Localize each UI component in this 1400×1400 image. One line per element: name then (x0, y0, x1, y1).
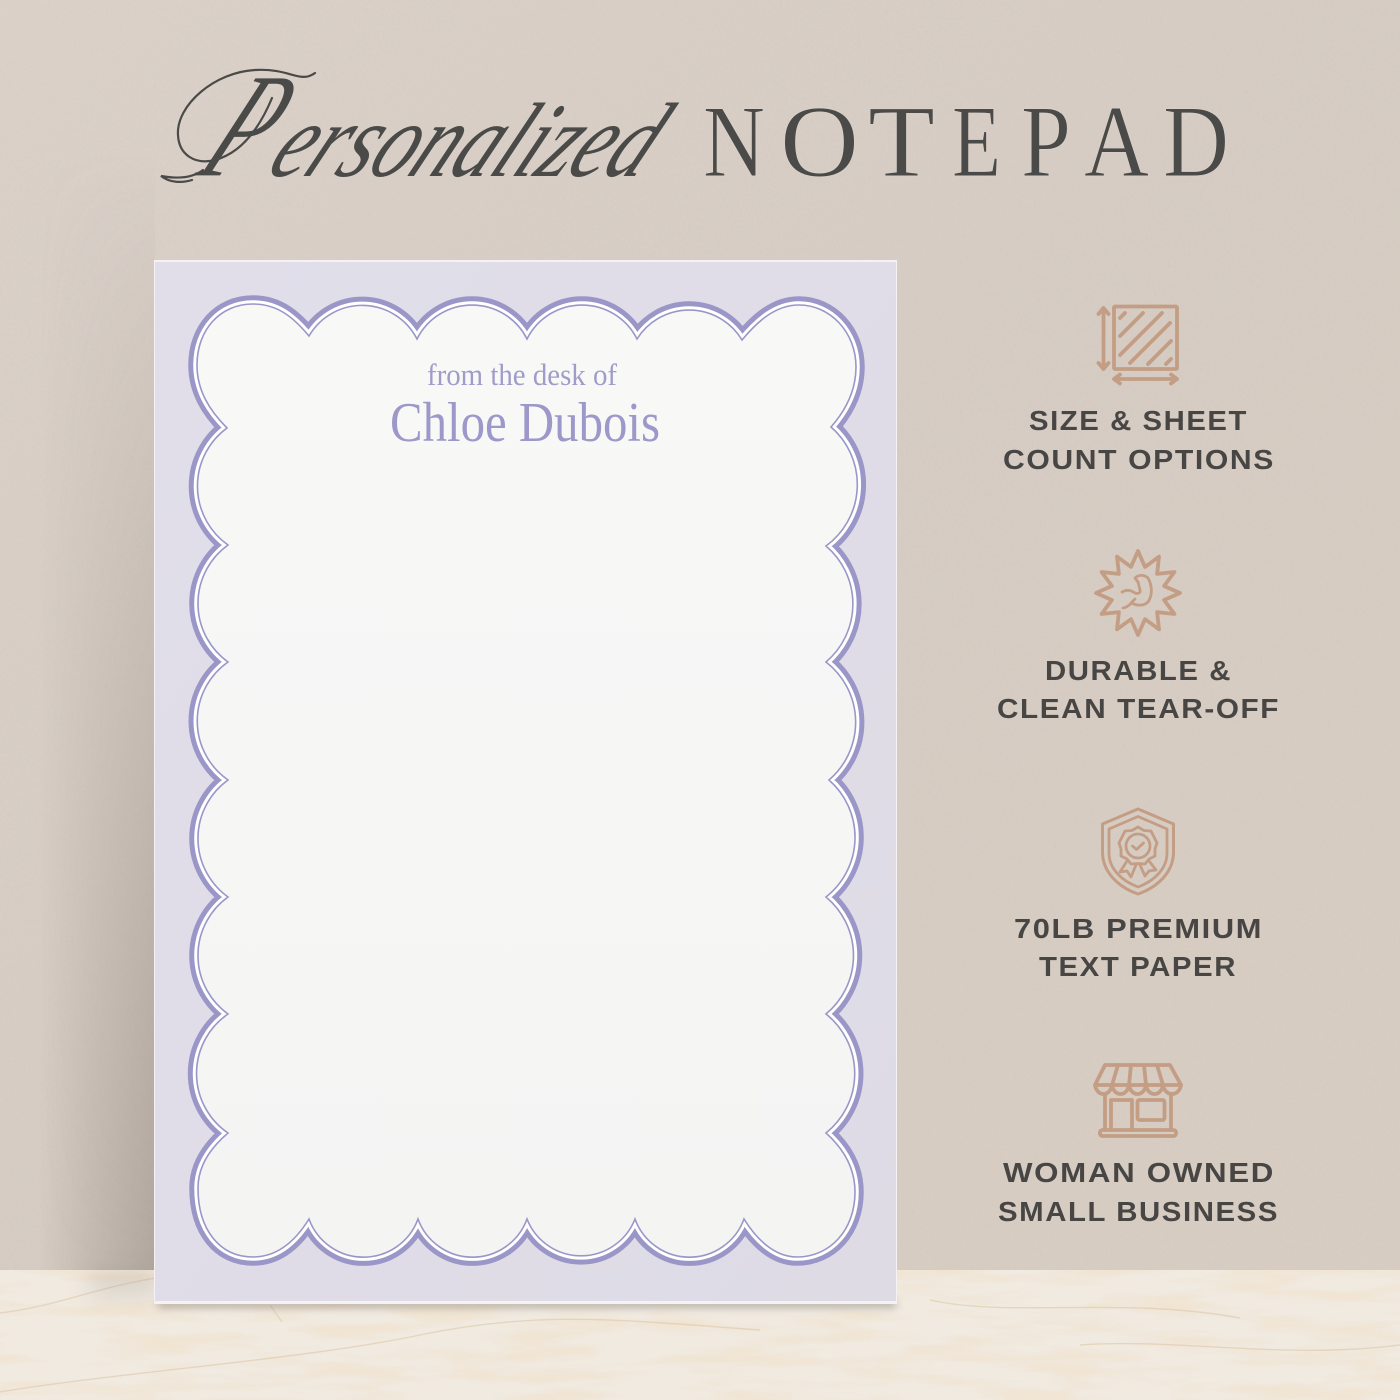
title word: NOTEPAD: E (952, 85, 1001, 199)
label: size and sheet count options (1003, 405, 1275, 475)
label: 70lb premium text paper: 70LB PREMIUM (1014, 913, 1263, 944)
title script word: Personalized: P (175, 42, 324, 209)
title (161, 42, 1229, 209)
title script word: Personalized: ersonalized (252, 82, 690, 199)
scalloped double border (197, 304, 857, 1257)
label: woman owned small business: WOMAN OWNED (1003, 1157, 1275, 1188)
label: durable and clean tear-off (997, 655, 1280, 724)
feature: woman owned business (998, 1065, 1279, 1227)
label: 70lb premium text paper (1014, 913, 1263, 982)
label: woman owned small business (998, 1157, 1279, 1227)
title word: NOTEPAD: D (1163, 85, 1229, 199)
feature: durable tear-off (997, 551, 1280, 724)
panel: notepad (154, 260, 897, 1304)
label: 70lb premium text paper: TEXT PAPER (1039, 951, 1237, 982)
icon: shield with award rosette (1102, 809, 1174, 894)
title script word: Personalized (161, 42, 711, 209)
title flourish on the script capital (161, 70, 315, 182)
feature: premium paper (1014, 809, 1263, 982)
notepad name: Chloe Dubois: Chloe Dubois (390, 392, 660, 454)
label: durable and clean tear-off: DURABLE & (1045, 655, 1232, 686)
label: size and sheet count options: SIZE & SHEET (1029, 405, 1248, 436)
icon: flexed arm in starburst (1096, 551, 1180, 635)
title word: NOTEPAD: N (703, 85, 765, 199)
icon: storefront with awning (1095, 1065, 1181, 1136)
label: durable and clean tear-off: CLEAN TEAR-OFF (997, 693, 1280, 724)
title word: NOTEPAD: O (780, 85, 859, 199)
label: woman owned small business: SMALL BUSINESS (998, 1196, 1279, 1227)
icon: square with dimension arrows (1098, 306, 1177, 384)
notepad heading: from the desk of: from the desk of (427, 357, 618, 392)
title word: NOTEPAD: A (1084, 85, 1149, 199)
floor shadow left of notepad (90, 1272, 160, 1294)
label: size and sheet count options: COUNT OPTIONS (1003, 444, 1275, 475)
marble floor (0, 1268, 1400, 1400)
notepad drop shadow (158, 1300, 896, 1308)
title word: NOTEPAD: P (1021, 85, 1071, 199)
wall shadow left of notepad (61, 362, 154, 1270)
title word: NOTEPAD: T (868, 85, 935, 199)
feature: size and sheet count (1003, 306, 1275, 475)
